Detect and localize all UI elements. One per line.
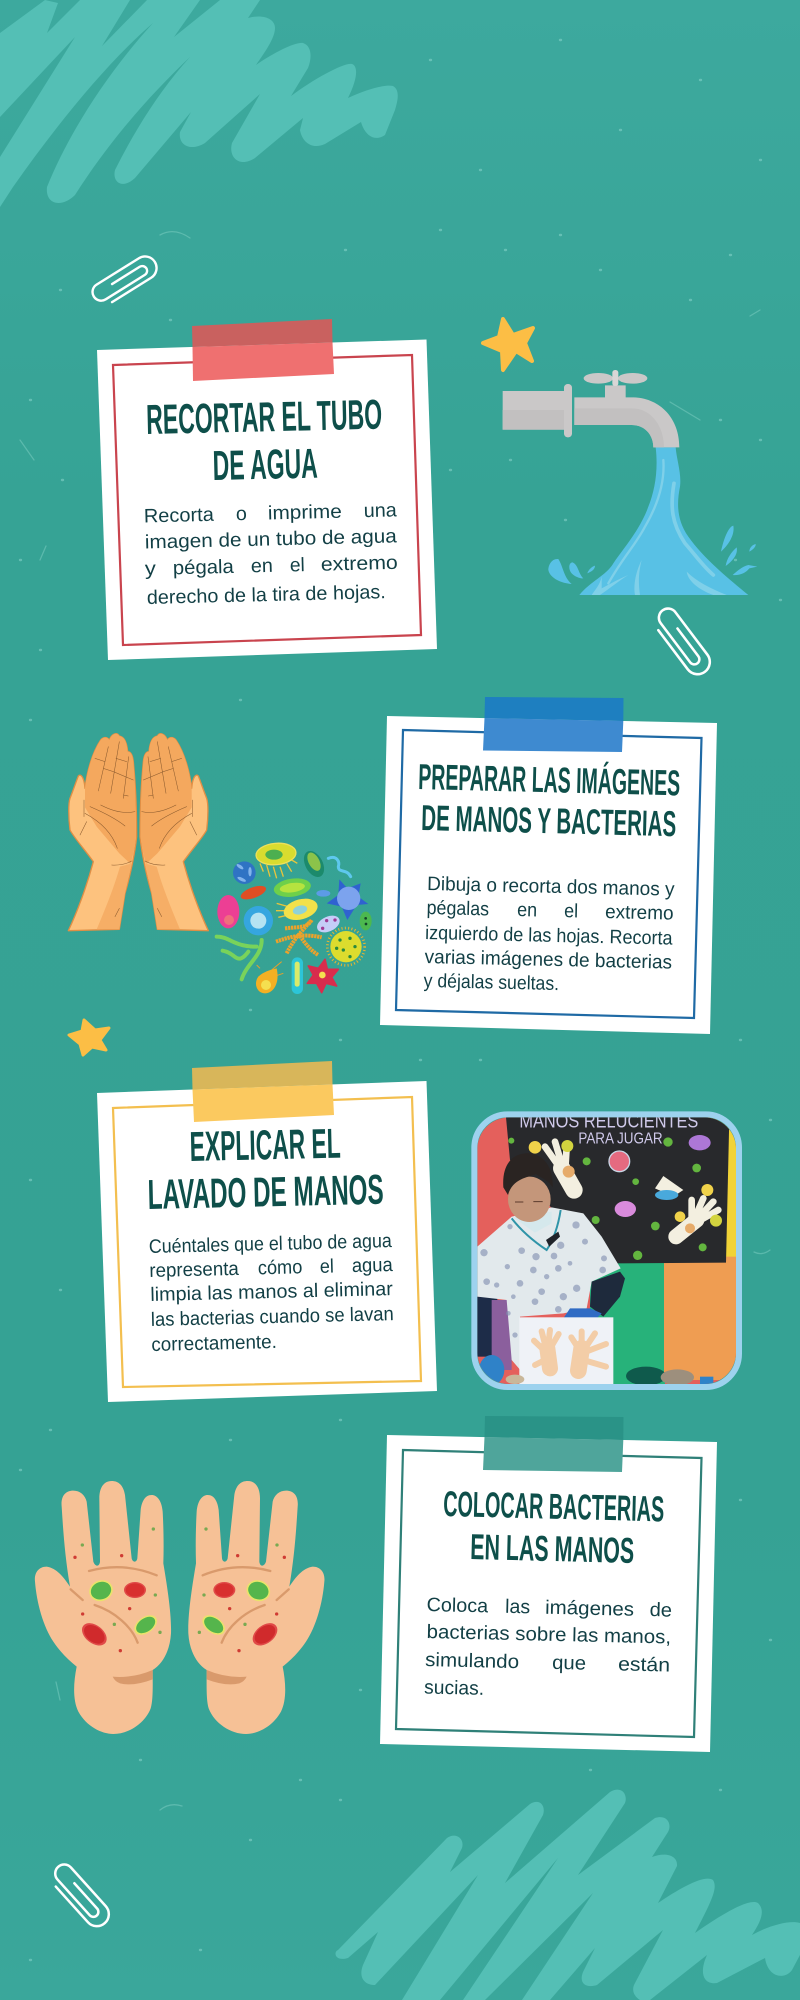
text: step 2 body: en [517, 899, 537, 922]
green worms [217, 937, 262, 979]
text: step 3 body: Cuéntales que el tubo de agua [149, 1230, 392, 1258]
text: step 3 body: representa [149, 1258, 239, 1282]
text: step 2 body: Dibuja o recorta dos manos y [427, 873, 675, 901]
text: step 4 body [424, 1594, 672, 1700]
board title: MANOS RELUCIENTES [519, 1111, 698, 1132]
text: step 2 body: izquierdo de las hojas. Recorta [425, 922, 673, 950]
faucet body [503, 370, 679, 447]
tape: red [192, 319, 334, 381]
heading: step 1: DE AGUA [212, 440, 318, 489]
face and hair [503, 1153, 553, 1222]
text: step 3 body: agua [352, 1254, 393, 1277]
yellow cell [276, 895, 320, 923]
table items [506, 1367, 713, 1385]
tape: blue [483, 697, 624, 752]
panel: step 3 card [97, 1061, 437, 1402]
scrub pattern [480, 1221, 607, 1338]
text: step 2 body: y déjalas sueltas. [423, 970, 559, 995]
photo frame [474, 1114, 739, 1387]
tape: teal [483, 1416, 624, 1472]
paper with hands [519, 1317, 613, 1384]
heading: step 2 [418, 756, 681, 844]
text: step 4 body: simulando [425, 1649, 520, 1673]
spiky ball [327, 928, 365, 965]
text: step 1 body: imprime [268, 501, 342, 524]
illustration: water faucet [503, 370, 757, 595]
cyan rod [292, 957, 303, 994]
text: step 1 body: extremo [321, 552, 398, 576]
text: step 4 body: imágenes [545, 1597, 635, 1621]
heading: step 1: RECORTAR EL TUBO [146, 391, 383, 443]
gloves on board [529, 1140, 722, 1237]
text: step 2 body: varias imágenes de bacterias [424, 946, 673, 974]
text: step 1 body: y [145, 558, 156, 580]
illustration: dirty hands [35, 1481, 324, 1734]
photo: teacher with hands board [474, 1111, 739, 1387]
orange drop [256, 962, 283, 993]
dark green microbe [300, 848, 328, 880]
text: step 4 body: sucias. [424, 1677, 484, 1700]
purple spots [314, 912, 342, 936]
text: step 4 body: de [649, 1599, 672, 1622]
text: step 3 body: el [320, 1255, 334, 1278]
squiggle [328, 857, 351, 877]
tape: yellow [192, 1061, 334, 1122]
text: step 1 body: una [364, 499, 397, 522]
text: step 1 body: imagen de un tubo de agua [145, 525, 397, 553]
icon: star left [69, 1020, 109, 1055]
text: step 2 body: pégalas [426, 897, 490, 920]
panel: step 4 card [380, 1416, 717, 1752]
orange filaments [276, 920, 322, 955]
icon: star top [483, 319, 533, 370]
blue spiky [327, 879, 368, 920]
collar and mask [512, 1210, 561, 1250]
germs on board [508, 1135, 711, 1260]
text: step 2 body: extremo [605, 901, 674, 925]
germs [73, 1527, 162, 1652]
woman body [477, 1207, 621, 1372]
board title [520, 1117, 698, 1144]
text: step 3 body: limpia las manos al eliminar [150, 1278, 394, 1306]
icon: paperclip right [650, 605, 715, 679]
text: step 2 body: el [564, 900, 578, 922]
scribble: bottom right [335, 1790, 800, 2000]
text: step 4 body: Coloca [426, 1594, 489, 1617]
text: step 1 body: el [290, 554, 305, 576]
left hand [35, 1481, 171, 1734]
text: step 1 body: Recorta [144, 504, 214, 527]
red rod [239, 883, 268, 902]
text: step 1 body: en [251, 555, 273, 577]
heading: step 1 [146, 391, 383, 489]
left furniture [477, 1297, 512, 1385]
pink microbe [217, 895, 239, 928]
small green [360, 912, 372, 930]
magenta star [307, 959, 338, 993]
cyan ball [244, 906, 273, 935]
text: step 4 body: bacterias sobre las manos, [426, 1621, 671, 1649]
arm and glove [564, 1272, 625, 1318]
text: step 3 body [149, 1230, 394, 1356]
panel: step 1 card [97, 319, 437, 660]
text: step 3 body: las bacterias cuando se lavan [151, 1303, 394, 1331]
board title: PARA JUGAR [578, 1130, 663, 1147]
blue cluster [233, 861, 256, 884]
heading: step 3 [147, 1120, 384, 1218]
text: step 1 body [144, 499, 398, 609]
text: step 2 body [423, 873, 675, 995]
text: step 4 body: que [552, 1652, 586, 1675]
heading: step 3: LAVADO DE MANOS [147, 1166, 384, 1218]
green oval [273, 876, 312, 899]
scribble: top left [0, 0, 398, 207]
small blue [316, 890, 330, 897]
icon: paperclip top [89, 252, 161, 309]
panel: step 2 card [380, 697, 717, 1034]
text: step 3 body: correctamente. [151, 1331, 277, 1356]
right hand [188, 1481, 324, 1734]
heading: step 3: EXPLICAR EL [189, 1120, 341, 1170]
left hand [68, 734, 137, 931]
text: step 1 body: pégala [173, 556, 234, 579]
text: step 1 body: derecho de la tira de hojas. [147, 581, 386, 609]
heading: step 4 [443, 1483, 665, 1571]
heading: step 4: EN LAS MANOS [470, 1526, 635, 1571]
icon: paperclip bottom [47, 1861, 114, 1931]
text: step 4 body: están [618, 1653, 670, 1677]
yellow jelly [255, 842, 297, 878]
water stream [548, 447, 757, 595]
text: step 4 body: las [505, 1596, 531, 1618]
photo content [477, 1111, 736, 1385]
right hand [140, 734, 208, 931]
text: step 1 body: o [236, 503, 247, 525]
illustration: bacteria cluster [217, 842, 372, 994]
text: step 3 body: cómo [258, 1256, 303, 1279]
illustration: cupped hands [68, 734, 208, 931]
